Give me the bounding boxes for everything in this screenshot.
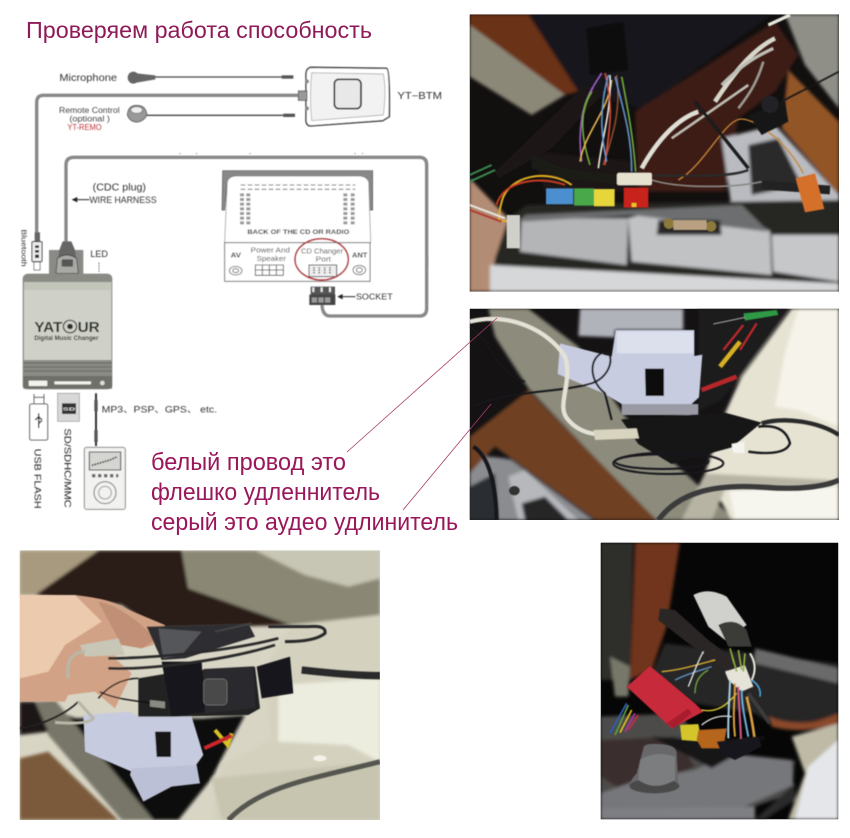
- icon: SD card: SD: [63, 407, 76, 413]
- socket arrow and label: SOCKET: [356, 292, 393, 302]
- label: Bluetooth: Bluetooth: [19, 229, 26, 267]
- top part of the diagram: [19, 67, 442, 300]
- icon: MP3 player: [84, 447, 125, 509]
- main wire harness cable: [66, 157, 427, 267]
- icon: microphone with cable: [128, 72, 293, 84]
- caption line 1: белый провод это: [151, 449, 346, 476]
- label: AV: AV: [231, 250, 241, 259]
- icon: SD card: [58, 393, 79, 421]
- subtitle: Digital Music Changer: Digital Music Changer: [34, 335, 99, 342]
- label: MP3 PSP GPS etc: MP3、PSP、GPS、 etc.: [102, 405, 217, 415]
- label: SD/SDHC/MMC: SD/SDHC/MMC: [63, 428, 73, 508]
- label: CD Changer Port: [301, 246, 343, 264]
- label: YT-REMO: YT-REMO: [67, 123, 102, 132]
- icon: AV socket: [229, 266, 242, 275]
- highlight circle: [295, 239, 348, 280]
- label: USB FLASH: USB FLASH: [33, 449, 43, 509]
- cable to socket: [322, 257, 427, 316]
- small ticks above the harness: [180, 151, 363, 155]
- label: CDC plug: (CDC plug): [93, 183, 146, 194]
- brand: YATOUR: YAT⦿UR: [34, 319, 100, 336]
- leader to grey cable: [403, 404, 491, 510]
- icon: socket bottom: [309, 295, 335, 305]
- LED pointer: [98, 263, 100, 272]
- leader lines: [347, 318, 497, 510]
- label: YT-BTM: YT−BTM: [397, 91, 442, 102]
- label: Power and Speaker: Speaker: [257, 254, 286, 263]
- label: LED: LED: [90, 249, 109, 259]
- icon: power connector: [255, 265, 283, 275]
- Bluetooth cable: [37, 95, 298, 233]
- label: wire harness with arrow: WIRE HARNESS: [89, 195, 157, 205]
- wiring diagram: [19, 67, 442, 509]
- label: Power and Speaker: [251, 245, 290, 263]
- icon: Bluetooth plug: [32, 232, 42, 270]
- icon: CD changer connector: [309, 265, 337, 277]
- caption line 2: флешко удленнитель: [151, 479, 380, 506]
- caption line 3: серый это аудео удлинитель: [151, 509, 458, 536]
- socket arrow and label: [337, 292, 393, 302]
- icon: radio back panel: [222, 171, 373, 281]
- icon: YT-BTM module: [298, 67, 389, 126]
- label: Remote Control: (optional ): [69, 115, 110, 124]
- lower part of the diagram: [23, 257, 427, 509]
- label: back of the CD or radio: BACK OF THE CD OR RADIO: [247, 229, 349, 236]
- socket connector: [311, 287, 335, 300]
- leader to white cable: [347, 318, 497, 452]
- audio cable: [94, 393, 98, 446]
- photo: radio wiring with red connector: [601, 543, 838, 819]
- label: Microphone: Microphone: [59, 73, 117, 84]
- label: Remote Control: [59, 106, 120, 132]
- icon: ANT socket: [353, 265, 366, 275]
- photo: USB and audio extensions routed over box: [470, 309, 839, 520]
- photo: hand holding taped adapter: [20, 550, 380, 820]
- label: ANT: ANT: [352, 250, 368, 259]
- photo: radio back with wiring: [470, 14, 839, 292]
- icon: DB connector: [49, 241, 83, 274]
- label: CD Changer Port: CD Changer: [301, 246, 343, 255]
- icon: YATOUR main unit: [23, 274, 112, 389]
- icon: USB flash: [30, 394, 48, 440]
- annotation text: [151, 449, 458, 536]
- icon: remote button with cable: [127, 105, 295, 122]
- title: Проверяем работа способность: [26, 17, 372, 43]
- label: Remote Control: Remote Control: [59, 106, 120, 115]
- label: CD Changer Port: Port: [316, 255, 332, 264]
- label: Power and Speaker: Power And: [251, 245, 290, 254]
